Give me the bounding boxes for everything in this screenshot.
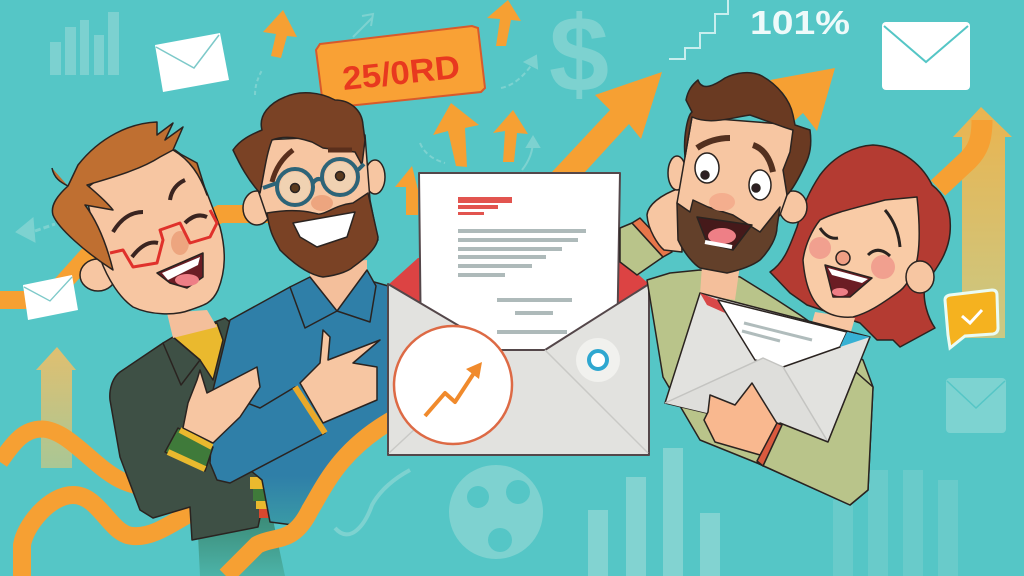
raised sleeve	[620, 223, 663, 275]
envelope icon top left	[155, 33, 229, 92]
faint envelope icon right	[946, 378, 1006, 433]
collar	[163, 337, 200, 385]
eyes and brow	[820, 210, 900, 256]
eyes	[695, 153, 771, 200]
orange arrows	[263, 0, 835, 215]
right ear	[779, 191, 807, 223]
raised cuff	[632, 218, 672, 257]
neck	[810, 312, 855, 335]
smile	[293, 212, 355, 247]
glasses	[110, 210, 217, 267]
face	[258, 135, 378, 275]
letter	[419, 173, 620, 350]
stepped growth line	[669, 0, 728, 59]
red liner	[388, 258, 650, 310]
hair	[52, 122, 183, 270]
person: woman	[770, 145, 950, 347]
jacket	[647, 270, 873, 505]
main envelope	[388, 173, 650, 455]
badge with label	[316, 26, 485, 108]
left ear	[243, 191, 271, 225]
left ear	[668, 156, 686, 190]
cuff	[295, 387, 325, 433]
brows	[697, 138, 773, 172]
orange curved arrow right	[938, 120, 982, 188]
nose	[311, 195, 333, 211]
ear	[80, 259, 116, 291]
envelope body	[388, 284, 649, 455]
envelope fold lines	[389, 350, 648, 453]
hand	[300, 330, 380, 423]
mouth	[825, 265, 872, 297]
face	[85, 150, 224, 314]
raised hand	[647, 188, 682, 252]
cheeks	[809, 237, 895, 279]
tie stripes	[250, 477, 270, 518]
cuff	[165, 428, 213, 471]
person: second man	[210, 93, 392, 525]
jacket	[110, 318, 270, 540]
hand	[704, 383, 778, 455]
neck	[700, 265, 740, 300]
faint bar chart top left	[50, 12, 119, 75]
faint small arrows	[255, 14, 539, 170]
neck	[310, 260, 367, 311]
hand	[183, 367, 260, 443]
ear	[906, 261, 934, 293]
mouth	[157, 253, 203, 288]
sleeve	[210, 387, 325, 483]
growth percentage: 101%	[750, 4, 850, 41]
left man hand and cuff	[165, 367, 260, 471]
gold arrow right	[953, 107, 1012, 338]
faint bar chart bottom right	[833, 470, 958, 576]
hair	[770, 145, 950, 347]
collar	[290, 270, 376, 328]
lower sleeve	[757, 372, 873, 505]
glasses	[263, 159, 364, 205]
envelope icon left	[23, 275, 78, 320]
face	[677, 117, 795, 240]
nose	[836, 251, 850, 265]
faint squiggle arrow	[335, 470, 410, 534]
person: third man	[620, 73, 873, 505]
nose	[171, 231, 189, 255]
hair side	[173, 150, 207, 195]
person: left man	[52, 122, 285, 576]
seal	[576, 338, 620, 382]
chat bubble check	[945, 290, 998, 348]
badge with label: 25/0RD	[340, 48, 462, 97]
pants	[198, 515, 285, 576]
hair	[233, 93, 365, 193]
face	[803, 197, 919, 317]
right ear	[365, 160, 385, 194]
mouth	[697, 217, 752, 250]
envelope icon top right	[882, 22, 970, 90]
cuff	[757, 423, 782, 466]
shirt torso	[213, 280, 392, 525]
held envelope	[665, 293, 870, 442]
orange trend lines	[0, 214, 270, 576]
faint dashed arrow left	[16, 218, 55, 242]
nose	[709, 193, 735, 211]
tan arrow left	[36, 347, 76, 468]
neck	[167, 310, 217, 338]
chart badge	[394, 326, 512, 444]
faint globe icon	[449, 465, 543, 559]
shirt	[173, 323, 223, 380]
eyes	[280, 162, 355, 202]
hair	[685, 73, 811, 195]
eyes and brows	[113, 180, 207, 257]
brows	[272, 150, 352, 182]
beard	[267, 193, 378, 277]
faint bar chart bottom center	[588, 448, 720, 576]
beard	[677, 200, 780, 273]
orange trend line foreground	[226, 420, 392, 576]
